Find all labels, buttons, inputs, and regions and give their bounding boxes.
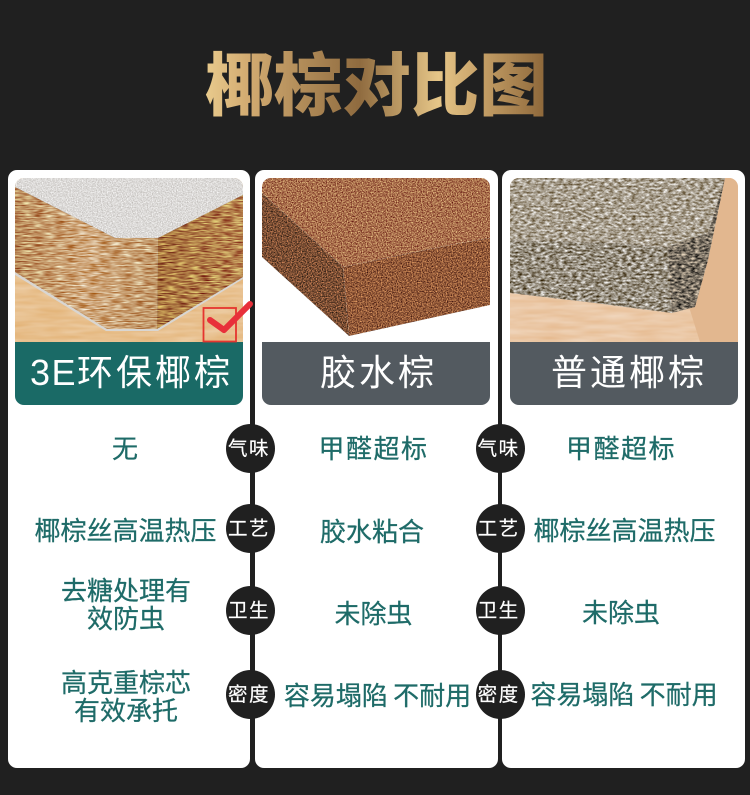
image: 3E coconut mattress corner [15,178,243,342]
badge: 工艺 right [476,504,525,553]
title: 椰棕对比图 [205,48,548,125]
badge: 卫生 left: 卫生 [228,600,270,622]
badge: 气味 left: 气味 [228,438,270,460]
text: 卫生 value: 未除虫 [582,598,660,628]
badge: 密度 left: 密度 [228,684,270,706]
text: 工艺 value: 椰棕丝高温热压 [533,516,716,546]
text: 密度 value: 高克重棕芯 [61,668,191,698]
text: 卫生 value: 效防虫 [87,604,165,634]
image: ordinary coconut mattress corner [510,178,738,342]
text: 气味 value: 甲醛超标 [566,434,676,464]
badge: 工艺 left: 工艺 [228,518,270,540]
badge: 卫生 right [476,586,525,635]
badge: 气味 right: 气味 [478,438,520,460]
text: 气味 value: 无 [112,434,138,464]
text: 密度 value [61,668,191,726]
badge: 气味 right [476,424,525,473]
label: 普通椰棕 [510,342,738,405]
icon: red check mark in box [202,301,253,342]
text: 密度 value: 有效承托 [74,696,178,726]
label: 3E环保椰棕: 3E环保椰棕 [30,352,233,393]
badge: 密度 right [476,670,525,719]
badge: 密度 left [226,670,275,719]
text: 密度 value: 容易塌陷 不耐用 [284,681,471,711]
label: 普通椰棕: 普通椰棕 [551,352,707,393]
label: 3E环保椰棕 [15,342,243,405]
panel: 胶水棕 [254,170,498,768]
panel: 普通椰棕 [502,170,745,768]
badge: 卫生 left [226,586,275,635]
panel: 3E环保椰棕 [8,170,250,768]
label: 胶水棕 [262,342,490,405]
image: glued coconut mattress corner [262,178,490,336]
badge: 工艺 left [226,504,275,553]
text: 卫生 value: 未除虫 [334,599,413,629]
text: 工艺 value: 胶水粘合 [320,517,424,547]
badge: 工艺 right: 工艺 [478,518,520,540]
text: 密度 value: 容易塌陷 不耐用 [530,680,718,710]
text: 气味 value: 甲醛超标 [318,434,429,464]
badge: 卫生 right: 卫生 [478,600,520,622]
badge: 密度 right: 密度 [478,684,520,706]
text: 卫生 value [61,576,191,634]
text: 工艺 value: 椰棕丝高温热压 [34,516,217,546]
label: 胶水棕: 胶水棕 [320,352,437,393]
text: 卫生 value: 去糖处理有 [61,576,191,606]
badge: 气味 left [226,424,275,473]
